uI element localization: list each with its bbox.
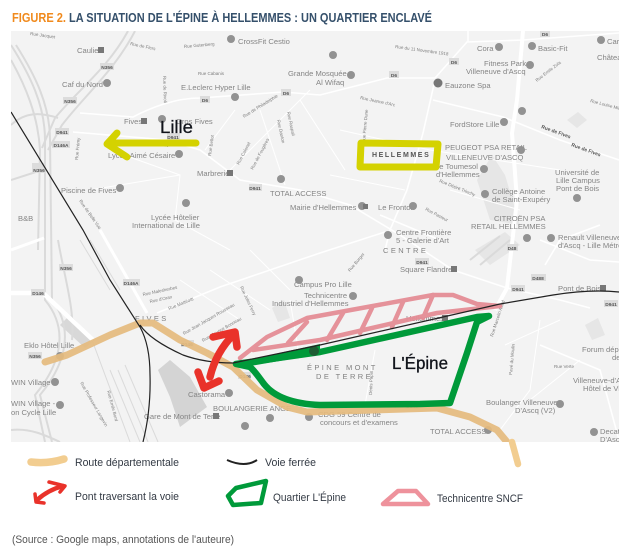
map labels: Fives	[124, 117, 142, 126]
map labels: Fitness Park	[484, 59, 526, 68]
map labels: Rue Malsence	[140, 139, 170, 148]
map labels: WIN Village	[11, 378, 51, 387]
annotation: cadre Hellemmes	[360, 143, 438, 167]
route tail below map	[512, 442, 518, 464]
annotation: voie ferrée	[11, 112, 619, 442]
road badges: D941	[56, 130, 68, 136]
map labels: CrossFit Cestio	[238, 37, 290, 46]
map labels: Gros Fives	[176, 117, 213, 126]
road badges: D146	[181, 342, 193, 348]
road badges: D6	[542, 32, 548, 38]
road badges: N356	[64, 99, 76, 105]
map labels: VILLENEUVE D'ASCQ	[446, 153, 524, 162]
map labels: FordStore Lille	[450, 120, 499, 129]
legend: voie ferrée	[227, 457, 316, 469]
map labels: Rue Raspail	[286, 111, 296, 136]
road badges: D488	[532, 276, 544, 282]
map labels: TOTAL ACCESS	[430, 427, 486, 436]
map labels: Forum dépar	[582, 345, 626, 354]
map labels: Hellemmes	[406, 314, 444, 323]
map labels: Villeneuve-d'Asc	[573, 376, 629, 385]
map labels: D'Asc	[600, 435, 620, 444]
road badges: D146A	[124, 281, 139, 287]
label: Lille: Lille	[160, 117, 193, 137]
map labels: Mairie d'Hellemmes	[290, 203, 357, 212]
map labels: Eauzone Spa	[445, 81, 491, 90]
map labels: Basic-Fit	[538, 44, 568, 53]
map labels: Castorama	[188, 390, 226, 399]
annotation: flèche Lille	[107, 133, 196, 157]
map labels: Rue Jeanne d'Arc	[360, 95, 396, 108]
map labels: Gare de Mont de Terre	[144, 412, 220, 421]
title: LA SITUATION DE L'ÉPINE À HELLEMMES : UN QUARTIER ENCLAVÉ	[69, 10, 432, 25]
map base	[11, 31, 629, 448]
map labels: Rue de Flers	[130, 41, 157, 51]
legend	[31, 457, 523, 505]
map labels: on Cycle Lille	[11, 408, 56, 417]
map labels: Caulier	[77, 46, 102, 55]
map labels: Denis Papin	[368, 370, 374, 395]
map labels: International de Lille	[132, 221, 200, 230]
map labels: Rue de Fives	[540, 124, 572, 141]
map labels: concours et d'examens	[320, 418, 398, 427]
road badges: N356	[33, 168, 45, 174]
map labels: Rue de Fives	[570, 142, 602, 159]
map labels: Technicentre	[304, 291, 347, 300]
map labels: Rue Cabanis	[198, 71, 225, 76]
road badges: D941	[605, 302, 617, 308]
map labels: Rue de Belle Vue	[78, 199, 103, 231]
annotation: route départementale	[45, 323, 512, 448]
map labels: Centre Frontière	[396, 228, 451, 237]
road badges: D941	[167, 135, 179, 141]
map labels: Rue de Philadelphie	[242, 93, 279, 119]
road badges: D6	[391, 73, 397, 79]
legend: quartier L'Épine: Quartier L'Épine	[273, 491, 346, 504]
map labels: Rue Pasteur	[425, 206, 449, 223]
map labels: Carr	[607, 37, 622, 46]
map labels: Grande Mosquée	[288, 69, 347, 78]
map labels: Rue Jean Jacques Rousseau	[182, 302, 236, 336]
quartier wedge	[252, 344, 320, 366]
map labels: Rue Emile Zola	[535, 60, 562, 83]
label: L'Épine: L'Épine	[392, 353, 448, 373]
road badges: N356	[101, 65, 113, 71]
road badges: D6	[202, 98, 208, 104]
map labels: BOULANGERIE ANGE	[213, 404, 291, 413]
map labels: Château	[597, 53, 626, 62]
map labels: Rue du 11 Novembre 1918	[395, 44, 449, 57]
road badges: N356	[29, 354, 41, 360]
legend: pont traversant la voie	[35, 482, 179, 503]
source note: (Source : Google maps, annotations de l'auteure)	[12, 534, 234, 546]
map pins	[51, 35, 605, 436]
map labels	[11, 31, 629, 444]
map labels: CITROËN PSA	[494, 214, 546, 223]
annotation: quartier L'Épine	[236, 316, 489, 405]
map labels: Hôtel de Vi	[583, 384, 620, 393]
road badges: D941	[512, 287, 524, 293]
annotation: technicentre SNCF	[240, 295, 500, 358]
map labels: Campus Pro Lille	[294, 280, 352, 289]
map labels: TOTAL ACCESS	[270, 189, 326, 198]
map labels: DE TERRE	[316, 372, 373, 381]
road badges: D6	[451, 60, 457, 66]
road badges: N356	[60, 266, 72, 272]
map labels: Pont de Bois	[558, 284, 601, 293]
map labels: Rue Danton	[276, 119, 286, 144]
map labels: Le Fronton	[378, 203, 415, 212]
map labels: Rue Marcelin Alard	[489, 299, 506, 337]
map labels: Rue Désiré Trinchy	[439, 178, 477, 198]
map labels: Rue Mattéotti	[168, 296, 194, 311]
legend: voie ferrée: Voie ferrée	[265, 457, 316, 469]
map labels: Rue Burger	[347, 251, 366, 273]
map labels: Rue d'Oran	[149, 294, 173, 304]
map labels: Square Flandres	[400, 265, 456, 274]
legend: quartier L'Épine	[228, 481, 346, 505]
map labels: Marbrerie	[197, 169, 230, 178]
map labels: d'Ascq - Lille Métro	[558, 241, 622, 250]
map labels: Rue Maurice Bonneau	[201, 316, 243, 343]
road badges: D6	[283, 91, 289, 97]
map labels: Université de	[555, 168, 599, 177]
map labels: CDG 59 Centre de	[318, 410, 381, 419]
épine marker	[309, 346, 319, 356]
map labels: Piscine Toumesol	[419, 162, 478, 171]
map labels: Rue Pierre Dune	[361, 109, 369, 143]
map labels: FIVES	[135, 314, 169, 323]
map labels: Lycée Hôtelier	[151, 213, 200, 222]
map labels: d'Hellemmes	[436, 170, 480, 179]
map labels: Caf du Nord	[62, 80, 103, 89]
map labels: WIN Village -	[11, 399, 56, 408]
map labels: ÉPINE MONT	[307, 363, 378, 372]
map labels: Collège Antoine	[492, 187, 545, 196]
map labels: Lycée Aimé Césaire	[108, 151, 175, 160]
legend: technicentre SNCF	[383, 491, 523, 505]
map labels: RETAIL HELLEMMES	[471, 222, 546, 231]
map labels: Renault Villeneuve	[558, 233, 621, 242]
map labels: Rue de Fougères	[249, 137, 271, 170]
legend: route départementale	[31, 457, 179, 469]
map labels: Rue Jacquet	[30, 31, 56, 40]
road badges: D941	[249, 186, 261, 192]
map labels: 5 - Galerie d'Art	[396, 236, 450, 245]
map labels: Pont de Bois	[556, 184, 599, 193]
map labels: B&B	[18, 214, 33, 223]
road badges: D146	[406, 404, 418, 410]
map labels: Cora	[477, 44, 494, 53]
legend: technicentre SNCF: Technicentre SNCF	[437, 493, 523, 505]
map labels: Industriel d'Hellemmes	[272, 299, 349, 308]
map labels: D'Ascq (V2)	[515, 406, 556, 415]
map labels: Rue Professeur Langevin	[79, 381, 109, 428]
map labels: Rue de Rivoli	[162, 76, 168, 103]
map labels: Rue Bellot	[207, 134, 215, 156]
map labels: Rue Malesherbes	[142, 285, 178, 297]
map labels: Al Wifaq	[316, 78, 344, 87]
map labels: Rue Emile Bord	[106, 390, 119, 422]
annotation: pont traversant la voie	[198, 332, 237, 388]
map labels: Rue Louise Michel	[590, 98, 627, 113]
map labels: Lille Campus	[556, 176, 600, 185]
map labels: Piscine de Fives	[61, 186, 116, 195]
legend: pont traversant la voie: Pont traversant la voie	[75, 491, 179, 503]
road badges: D146	[239, 374, 251, 380]
map labels: Rue Gutenberg	[184, 41, 215, 49]
label: Hellemmes: HELLEMMES	[372, 152, 430, 159]
road badges	[28, 31, 618, 410]
map labels: Rue Verte	[554, 364, 575, 369]
map labels: Pavé du Moulin	[508, 343, 516, 375]
map labels: Boulanger Villeneuve	[486, 398, 558, 407]
map	[11, 31, 629, 464]
map labels: PEUGEOT PSA RETAIL	[445, 143, 527, 152]
road badges: D48	[508, 246, 517, 252]
map labels: Eklo Hôtel Lille	[24, 341, 74, 350]
map labels: CENTRE	[383, 246, 428, 255]
map labels: Rue Frémy	[74, 137, 81, 160]
legend: route départementale: Route départementale	[75, 457, 179, 469]
map labels: Rue Jules Ferry	[239, 285, 257, 317]
road badges: D941	[416, 260, 428, 266]
title: FIGURE 2.	[12, 11, 66, 25]
road badges: D146	[32, 291, 44, 297]
road badges: D146A	[54, 143, 69, 149]
map labels: Decat	[600, 427, 621, 436]
map labels: E.Leclerc Hyper Lille	[181, 83, 251, 92]
map labels: des	[612, 353, 624, 362]
map labels: de Saint-Exupéry	[492, 195, 550, 204]
map labels: Rue Colonel	[235, 141, 252, 165]
train station icons	[98, 47, 606, 419]
map labels: Villeneuve d'Ascq	[466, 67, 526, 76]
